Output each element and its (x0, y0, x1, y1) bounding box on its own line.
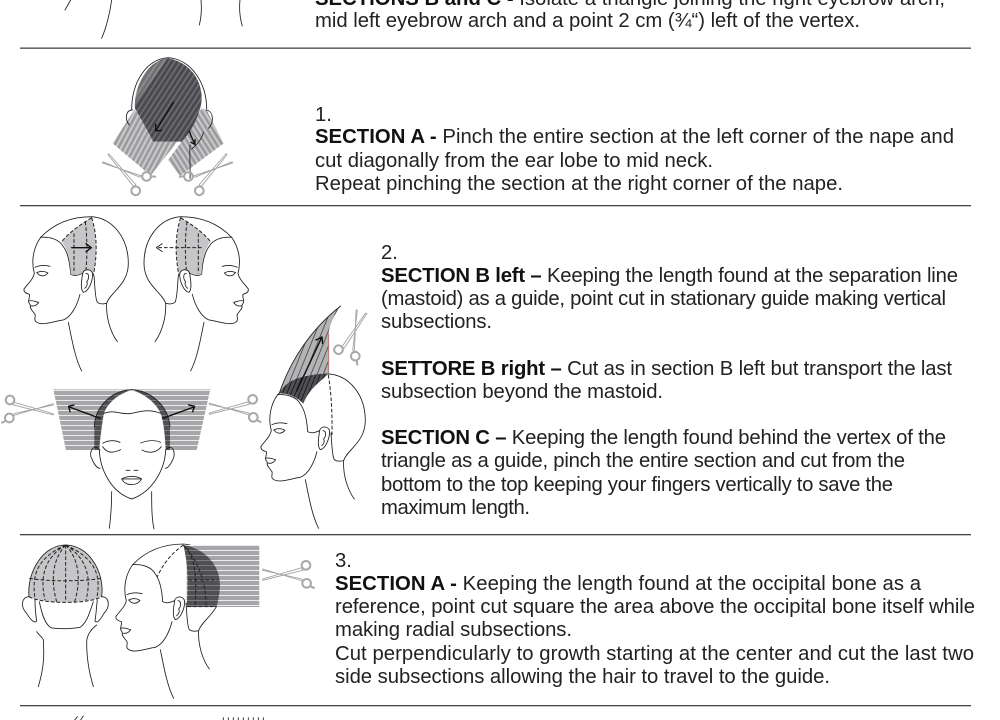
step 2 text: SECTION C – Keeping the length found behind the vertex of the (381, 427, 946, 449)
left profile head (24, 217, 128, 371)
step 1 text: cut diagonally from the ear lobe to mid neck. (315, 150, 713, 172)
intro text: sections B and C: mid left eyebrow arch and a point 2 cm (¾“) left of the vertex. (315, 10, 860, 32)
right arrow (163, 405, 195, 418)
face (99, 390, 166, 499)
step 3 text: SECTION A - Keeping the length found at the occipital bone as a (335, 573, 922, 595)
left arrow (69, 405, 100, 418)
step 2 text: subsection beyond the mastoid. (381, 381, 663, 403)
front head with horizontal lifted section (1, 389, 261, 529)
step 2 text: maximum length. (381, 497, 530, 519)
right scissors (209, 395, 261, 422)
step 2 text: subsections. (381, 311, 492, 333)
right head with lifted section (261, 306, 374, 528)
step 2 text (381, 242, 958, 519)
step 3 text: reference, point cut square the area above the occipital bone itself while (335, 596, 975, 618)
small hook arrow (189, 131, 195, 144)
step 1 text: Repeat pinching the section at the right corner of the nape. (315, 173, 843, 195)
step 2 text: SETTORE B right – Cut as in section B left but transport the last (381, 358, 952, 380)
right scissors (179, 147, 237, 199)
divider (20, 205, 971, 206)
back view head with radial subsections (22, 545, 108, 687)
step 2 text: (mastoid) as a guide, point cut in stationary guide making vertical (381, 288, 946, 310)
illustration: step 3 heads (22, 544, 315, 698)
lifted hair section (187, 545, 259, 607)
step 3 text: 3. (335, 550, 352, 572)
ears (126, 110, 212, 128)
step 1 text: SECTION A - Pinch the entire section at the left corner of the nape and (315, 126, 954, 148)
step 3 text: side subsections allowing the hair to travel to the guide. (335, 666, 830, 688)
cut arrow (156, 102, 173, 131)
step 3 text: Cut perpendicularly to growth starting at the center and cut the last two (335, 643, 974, 665)
step 2 text: triangle as a guide, pinch the entire section and cut from the (381, 450, 905, 472)
illustration: step 1 back of head with sections and scissors (98, 58, 237, 199)
raised light section (279, 306, 341, 393)
step 3 text: making radial subsections. (335, 619, 572, 641)
left scissors (98, 147, 156, 199)
intro text: sections B and C (315, 0, 945, 32)
left light section (113, 109, 177, 176)
top of next step illustrations (74, 716, 263, 720)
scissors (263, 561, 315, 588)
dark triangle section (135, 58, 202, 142)
scissors (332, 307, 374, 365)
dark base of section (279, 373, 328, 404)
step 2 text: SECTION B left – Keeping the length found at the separation line (381, 265, 958, 287)
right profile head, mirrored (144, 217, 248, 371)
right light section (168, 108, 224, 176)
step 2 text: bottom to the top keeping your fingers vertically to save the (381, 474, 893, 496)
dark hair bands (94, 390, 170, 450)
step 3 text (335, 550, 975, 688)
lighter upper-left part of the section (135, 59, 167, 104)
top neck lines from previous step (65, 0, 242, 38)
illustration: step 2 heads (1, 217, 374, 529)
divider (20, 705, 971, 706)
head outline (132, 58, 207, 110)
left scissors (1, 396, 53, 423)
lifted section trapezoid (53, 389, 210, 450)
step 1 text (315, 104, 954, 195)
lift arrow (297, 337, 323, 391)
divider (20, 534, 971, 535)
step 2 text: 2. (381, 242, 398, 264)
cut line (327, 333, 330, 373)
step 1 text: 1. (315, 104, 332, 126)
profile head with lifted section (116, 544, 315, 698)
divider (20, 48, 971, 49)
dark occipital section (183, 545, 220, 607)
